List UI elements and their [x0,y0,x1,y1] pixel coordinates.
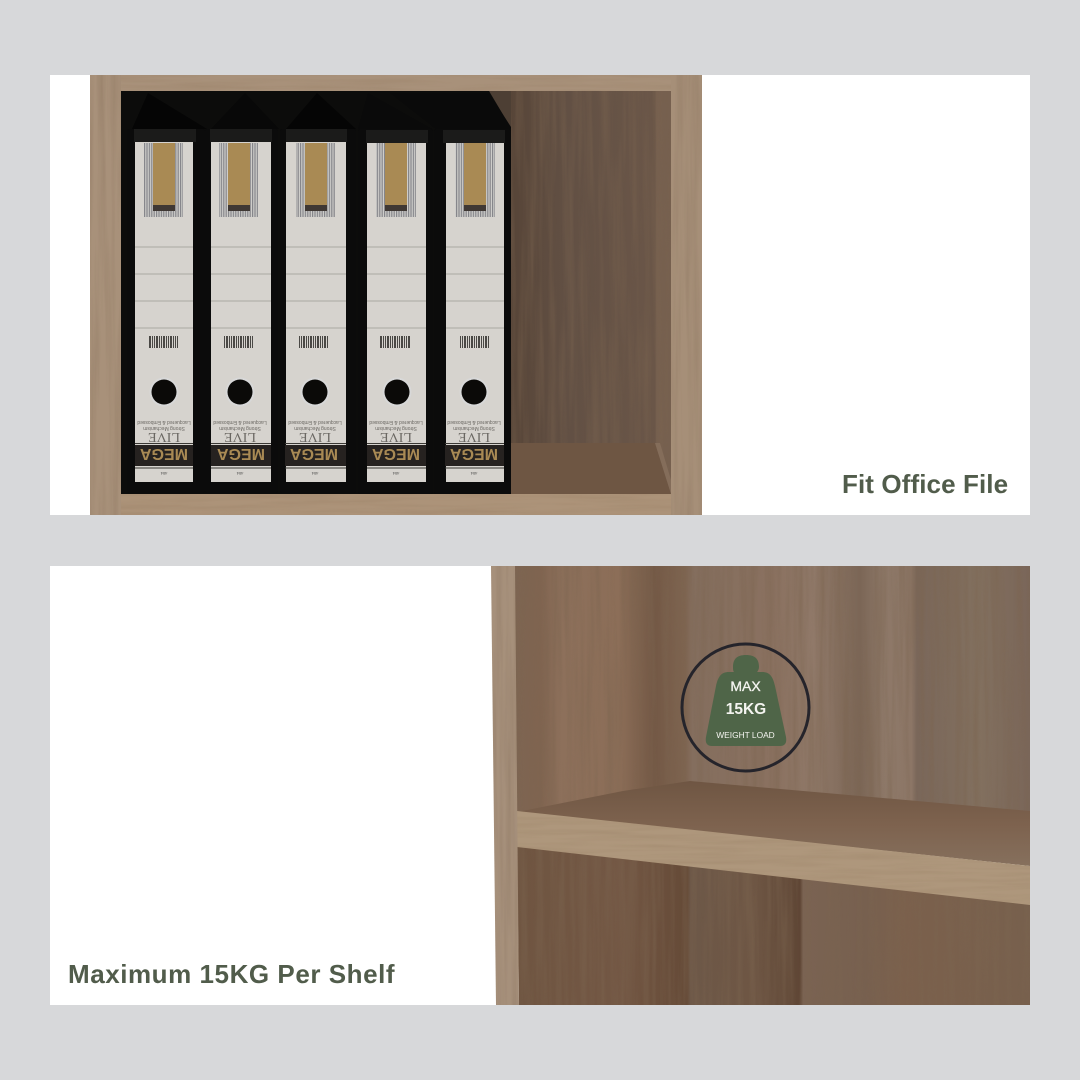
office file 1: Strong Mechanism [143,425,185,431]
icon: max 15kg weight badge: MAX [730,678,761,694]
office file 1: MEGA [140,445,188,462]
office file 4: LIVE [380,429,412,444]
office file 5: MEGA [450,445,498,462]
office file 3: Strong Mechanism [294,425,336,431]
heading: maximum 15kg per shelf: Maximum 15KG Per Shelf [68,959,395,989]
office file 1: Lacquered & Embossed [137,419,191,425]
panel: maximum 15kg per shelf [50,566,1030,1005]
icon: max 15kg weight badge: 15KG [726,701,766,718]
office file 4: 404 [392,471,399,476]
office file 3: LIVE [299,429,331,444]
office file 2: Lacquered & Embossed [213,419,267,425]
shelf unit frame [90,75,702,515]
office file 4: MEGA [372,445,420,462]
panel: fit office file [50,75,1030,515]
office file 2: 404 [236,471,243,476]
office file 5 [390,93,511,494]
office file 5: Strong Mechanism [453,425,495,431]
office file 5: 404 [470,471,477,476]
office file 5: Lacquered & Embossed [447,419,501,425]
office file 4: Lacquered & Embossed [369,419,423,425]
office file 3 [280,93,356,493]
icon: max 15kg weight badge [682,644,809,771]
office file 2 [205,93,279,493]
icon: max 15kg weight badge: WEIGHT LOAD [716,730,775,740]
office file 3: 404 [311,471,318,476]
office file 2: Strong Mechanism [219,425,261,431]
office file 3: MEGA [290,445,338,462]
office file 4: Strong Mechanism [375,425,417,431]
heading: fit office file: Fit Office File [842,469,1008,499]
office file 3: Lacquered & Embossed [288,419,342,425]
shelf close-up photo [491,566,1030,1005]
office file 4 [358,93,433,494]
office file 1 [127,93,207,493]
office file 1: LIVE [148,429,180,444]
office file 2: LIVE [224,429,256,444]
office file 1: 404 [160,471,167,476]
office file 5: LIVE [458,429,490,444]
icon: weight silhouette [706,655,786,746]
office file 2: MEGA [217,445,265,462]
